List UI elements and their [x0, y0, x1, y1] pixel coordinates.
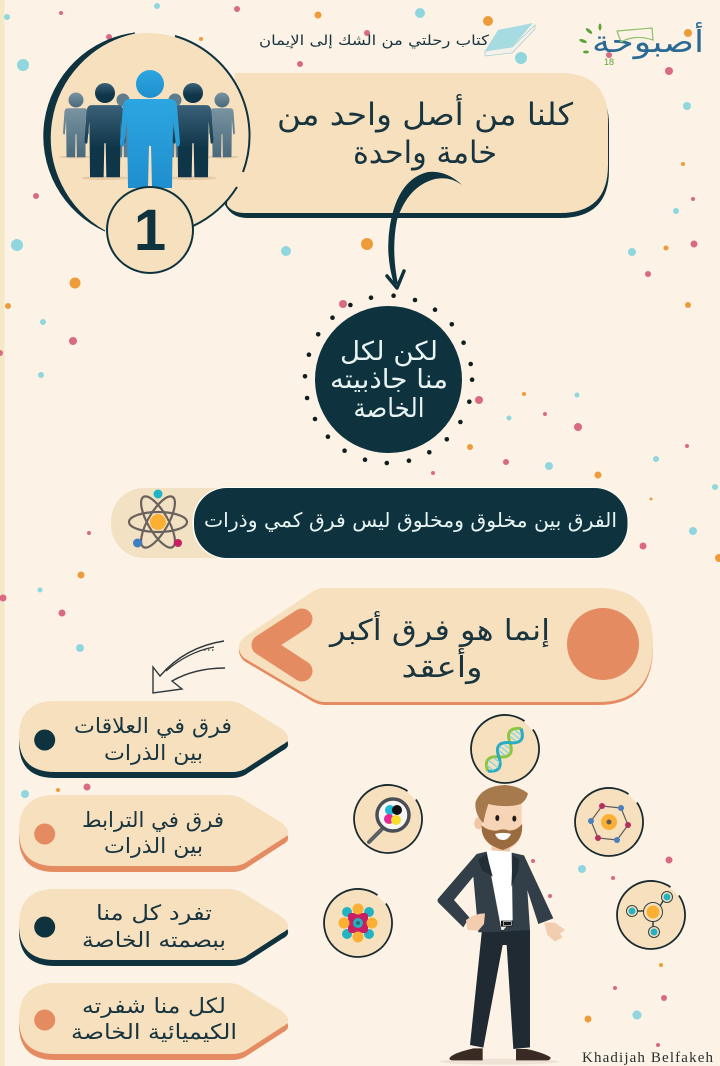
- tag text line 2: ببصمته الخاصة: [82, 928, 226, 952]
- title text line 2: خامة واحدة: [353, 135, 497, 171]
- bar back: [111, 488, 261, 558]
- floor shadows: [59, 156, 239, 180]
- callout text line 2: منا جاذبيته: [330, 365, 448, 395]
- book title text: كتاب رحلتي من الشك إلى الإيمان: [259, 33, 489, 49]
- icon: branched molecule: [617, 881, 685, 949]
- bullet: [34, 730, 55, 750]
- logo age: 18: [604, 57, 614, 67]
- callout text: لكن لكل: [340, 337, 438, 367]
- jacket: [437, 852, 553, 932]
- center person: [120, 70, 180, 188]
- face: [483, 800, 522, 849]
- bar text: الفرق بين مخلوق ومخلوق ليس فرق كمي وذرات: [204, 508, 617, 533]
- header: book title: [259, 23, 535, 56]
- bullet: [34, 1010, 55, 1030]
- number: 1: [134, 198, 166, 263]
- signature: Khadijah Belfakeh: [582, 1050, 714, 1066]
- man illustration: [437, 785, 565, 1065]
- tag: bonding: [19, 795, 288, 872]
- icon: magnifier: [354, 785, 422, 853]
- tag text: فرق في العلاقات: [74, 714, 232, 738]
- back people: [110, 94, 188, 157]
- number badge: [107, 187, 193, 273]
- panel body: [227, 73, 608, 213]
- ground shadow: [439, 1059, 559, 1065]
- orange circle: [567, 608, 639, 680]
- hair: [475, 785, 528, 823]
- logo crown: [617, 28, 653, 42]
- neck: [492, 840, 510, 863]
- circle fill: [44, 33, 250, 239]
- eyes: [495, 815, 499, 821]
- icon: book: [485, 23, 535, 56]
- bullet: [34, 824, 55, 844]
- bullet: [34, 916, 55, 938]
- icon: flower molecule: [324, 889, 392, 957]
- dark disc: [315, 306, 462, 453]
- mouth: [495, 833, 511, 840]
- bar front: [192, 487, 628, 559]
- arrow: curved down: [387, 172, 462, 288]
- shirt: [486, 850, 513, 922]
- lapels: [478, 854, 519, 887]
- tag text: لكل منا شفرته: [82, 994, 226, 1018]
- icon: atom: [129, 490, 187, 552]
- tag: chemical code: [19, 983, 288, 1060]
- icon: hexagon molecule: [575, 788, 643, 856]
- tag text: تفرد كل منا: [96, 901, 212, 925]
- dotted ring: [303, 293, 474, 465]
- callout text line 3: الخاصة: [354, 394, 424, 424]
- middle people: [85, 83, 213, 177]
- arrow: hand-drawn to list: [153, 641, 225, 693]
- callout: dark circle: [303, 293, 474, 465]
- beard: [482, 824, 522, 850]
- panel: bigger difference: [239, 588, 653, 705]
- panel body: [239, 588, 653, 702]
- circle outline right: [175, 36, 250, 226]
- trousers: [470, 930, 530, 1049]
- panel: atom bar: [111, 487, 628, 559]
- icon: people circle: [44, 33, 250, 239]
- chevron: [262, 619, 302, 671]
- belt: [501, 921, 512, 927]
- panel: title: [225, 73, 609, 218]
- title text: كلنا من أصل واحد من: [277, 94, 573, 133]
- text line 2: وأعقد: [402, 647, 482, 684]
- logo leaves: [579, 24, 602, 54]
- tag: fingerprint: [19, 889, 288, 966]
- icon: dna: [471, 715, 539, 783]
- hands: [466, 913, 565, 942]
- ear: [474, 817, 482, 829]
- logo: [579, 21, 704, 67]
- left edge strip: [0, 0, 4, 1066]
- tag text line 2: الكيميائية الخاصة: [71, 1020, 237, 1044]
- tag: relations: [19, 701, 288, 778]
- tag text line 2: بين الذرات: [104, 741, 203, 765]
- logo wordmark: أصبوحة: [592, 21, 704, 60]
- text line 1: إنما هو فرق أكبر: [328, 610, 550, 648]
- panel shadow: [239, 591, 653, 705]
- tag text: فرق في الترابط: [82, 808, 224, 832]
- outer people: [63, 92, 235, 157]
- shoes: [449, 1048, 551, 1060]
- panel shadow: [225, 78, 609, 218]
- tag text line 2: بين الذرات: [104, 834, 203, 858]
- circle outline left: [44, 33, 135, 231]
